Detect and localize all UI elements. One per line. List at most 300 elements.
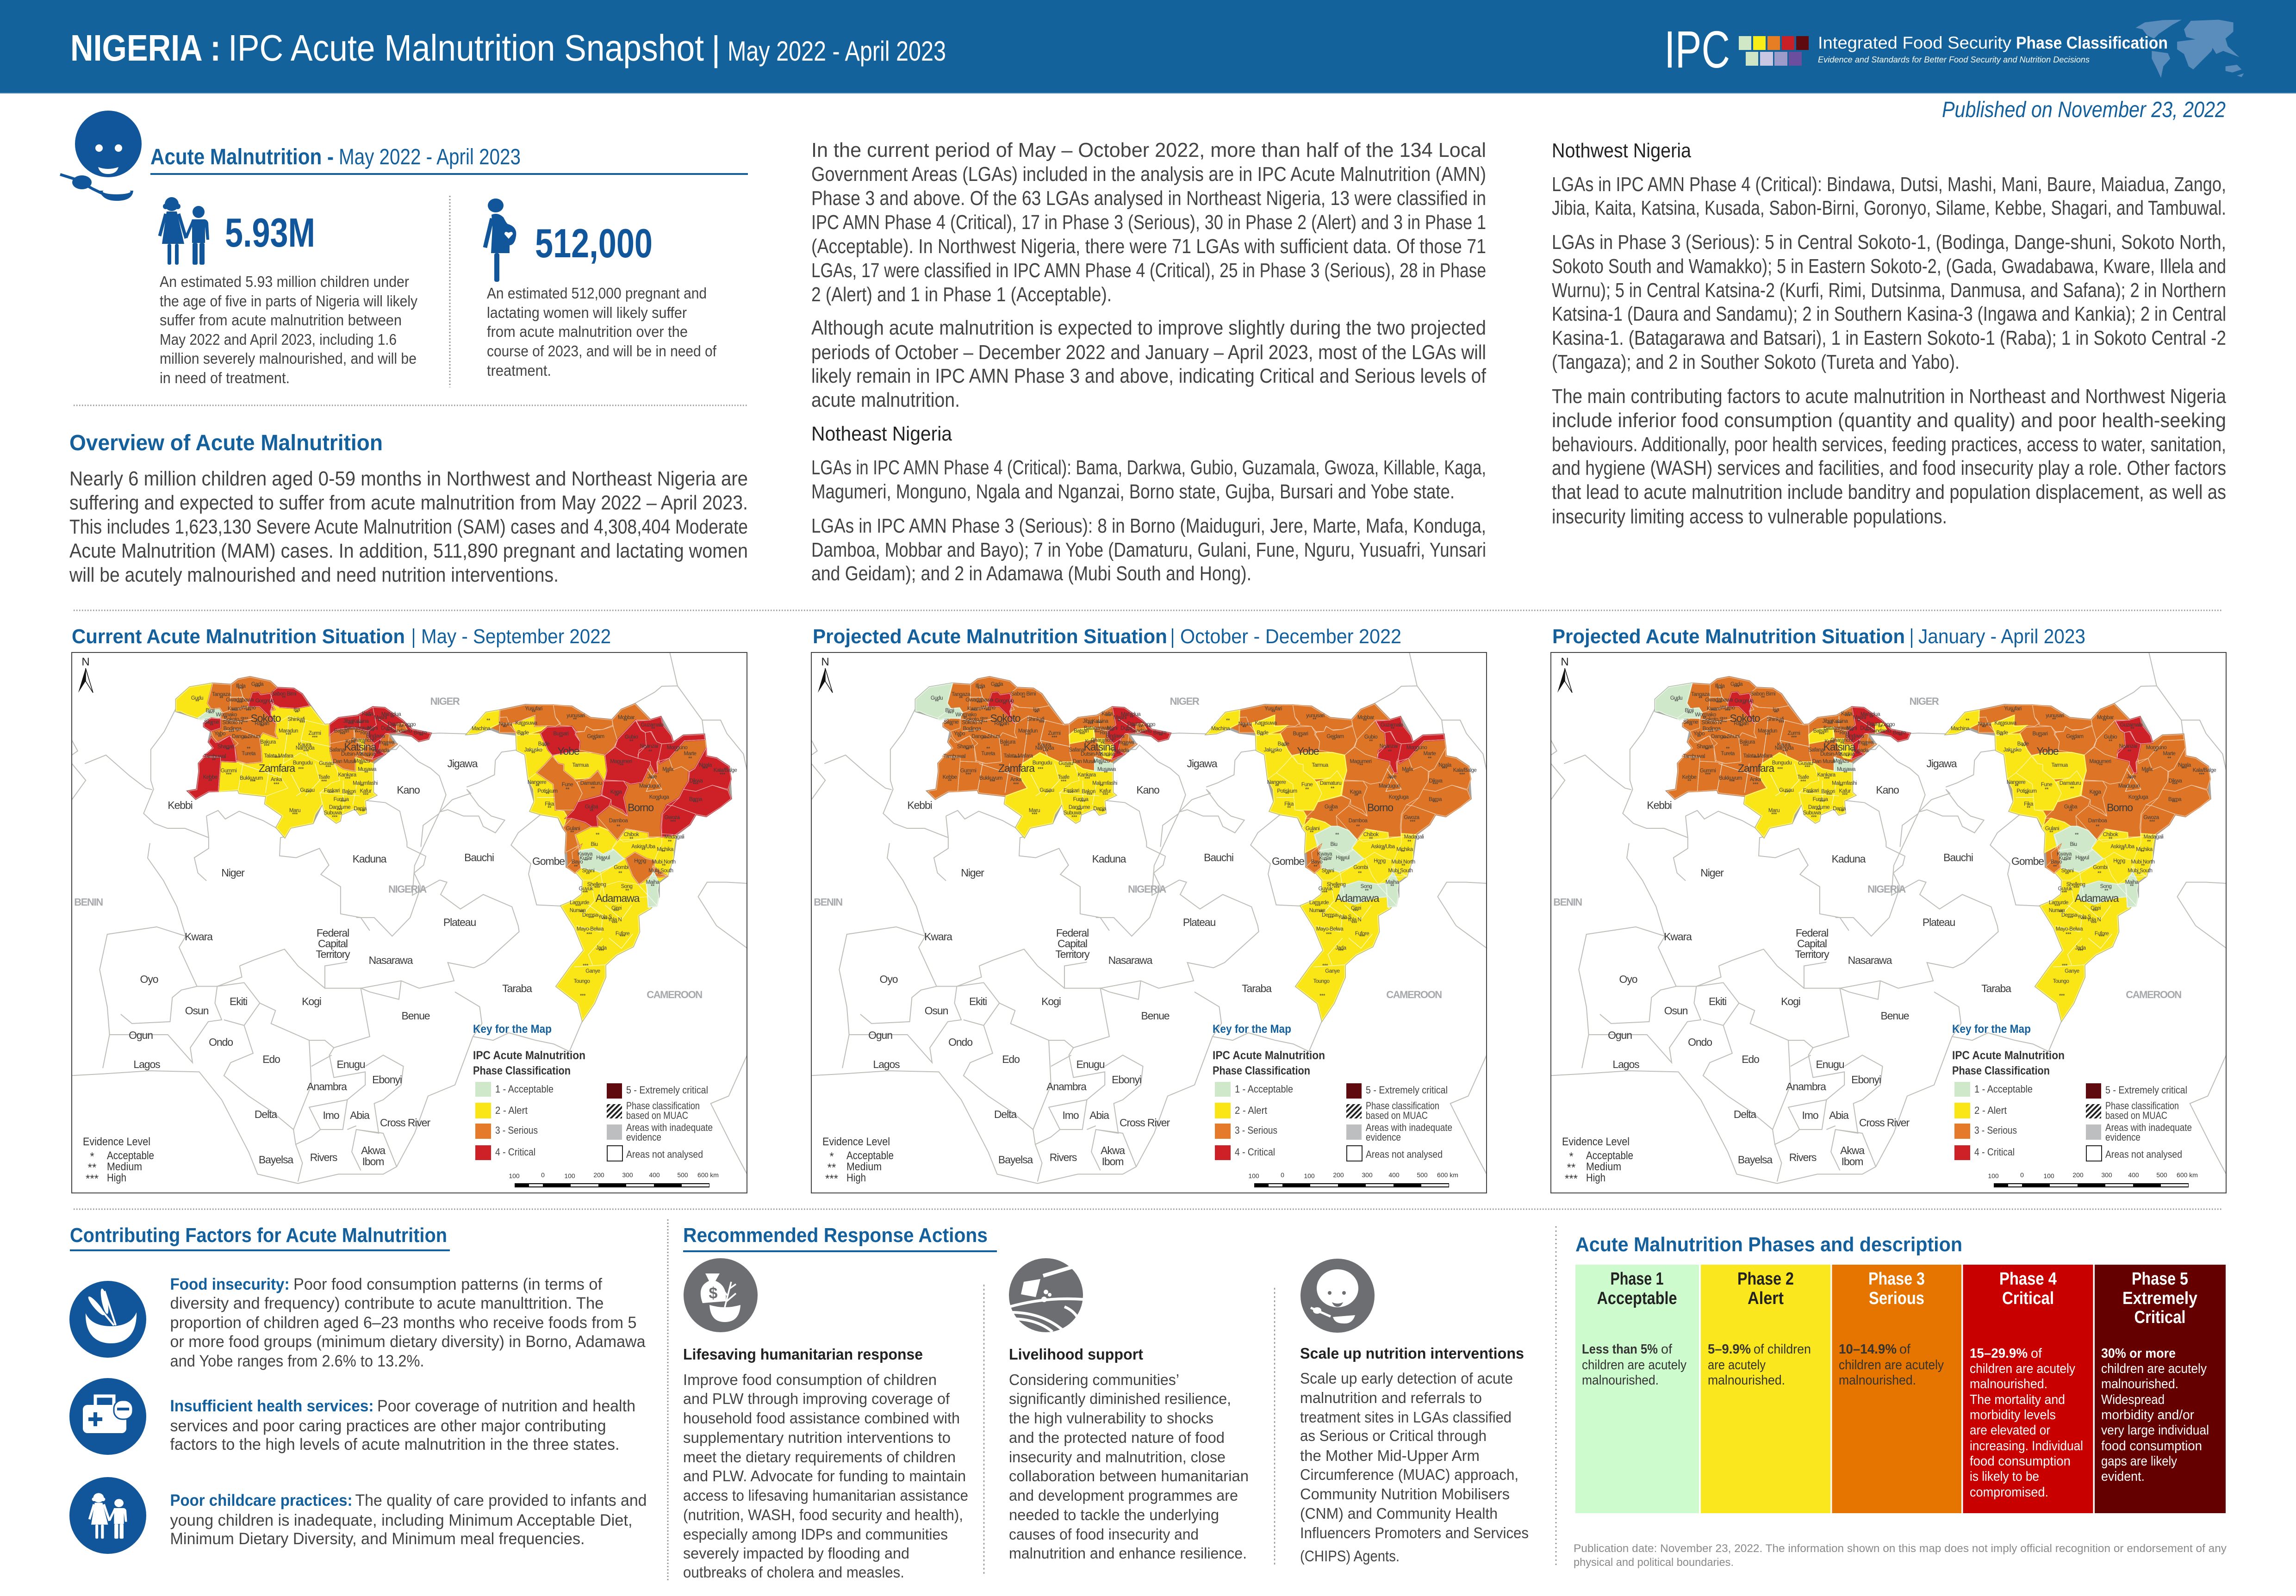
LGA labels: Biu (2070, 842, 2077, 847)
map key: 4 - Critical (1974, 1146, 2015, 1158)
icon: world map (2136, 20, 2244, 78)
LGA labels: *** (1459, 772, 1465, 778)
LGA labels: ** (1966, 718, 1970, 724)
LGA labels: ** (1761, 696, 1765, 701)
phase 4 column: 15–29.9% (1970, 1346, 2028, 1361)
panel: overview of acute malnutrition: Overview of Acute Malnutrition (69, 431, 383, 455)
state labels: Ogun (868, 1029, 892, 1041)
LGA labels: Shagari (218, 744, 234, 750)
LGA labels: Dikwa (1429, 778, 1443, 784)
LGA labels: ** (1130, 715, 1134, 721)
state labels: Borno (1367, 801, 1393, 814)
state labels: Edo (1002, 1053, 1020, 1065)
LGA labels: *** (1043, 749, 1049, 755)
LGA labels: *** (602, 917, 608, 923)
LGA labels: Sandamu (1870, 728, 1891, 734)
LGA labels: Bindawa (1106, 733, 1125, 739)
scale bar: 100 (564, 1172, 575, 1180)
LGA labels: ** (1849, 729, 1854, 734)
text block: current period and Northeast: Notheast Nigeria (811, 422, 952, 445)
LGA labels: Jakusko (524, 747, 542, 753)
panel: phases and description: Acute Malnutrition Phases and description (1575, 1233, 1962, 1256)
LGA labels: Kaga (1350, 789, 1362, 795)
LGA labels: ** (1341, 859, 1345, 864)
state labels: Nasarawa (369, 954, 413, 966)
phase 2 column: of children (1754, 1342, 1811, 1357)
LGA labels: ** (1100, 784, 1104, 789)
state labels: Nasarawa (1848, 954, 1892, 966)
LGA labels: Askira/Uba (631, 844, 656, 850)
LGA labels: Namoda (296, 745, 315, 751)
LGA labels: Kurfi (345, 739, 355, 745)
LGA labels: yunusari (2046, 713, 2064, 719)
LGA labels: Kwaya (578, 851, 593, 857)
LGA labels: Ganye (585, 969, 600, 974)
panel: overview of acute malnutrition (69, 431, 748, 586)
LGA labels: Dandume (1808, 805, 1829, 810)
LGA labels: ** (1697, 735, 1701, 740)
panel: acute malnutrition key figures (60, 111, 748, 387)
text block: Northwest Nigeria: (Tangaza); and 2 in Souther Sokoto (Tureta and Yabo). (1552, 351, 1960, 373)
LGA labels: ** (2109, 739, 2113, 745)
evidence level legend: Acceptable (107, 1149, 154, 1162)
stat: 5.93M children: suffer from acute malnutrition between (160, 311, 402, 329)
LGA labels: Batsari (1813, 728, 1828, 734)
LGA labels: Rabah (1734, 721, 1748, 727)
map key: based on MUAC (2105, 1110, 2167, 1121)
map key: evidence (2105, 1131, 2140, 1143)
LGA labels: ** (219, 696, 224, 702)
LGA labels: Nganzai (1380, 744, 1397, 749)
LGA labels: *** (720, 772, 726, 778)
state labels: Enugu (336, 1058, 365, 1070)
LGA labels: Kala/Balge (714, 768, 737, 773)
evidence level legend: Medium (107, 1161, 142, 1173)
LGA labels: Shinkafi (288, 717, 305, 722)
LGA labels: Jada (1336, 945, 1347, 951)
phase 5 column: food consumption (2101, 1439, 2202, 1453)
LGA labels: Kankia (361, 751, 376, 757)
LGA labels: Maiduguri (1379, 783, 1400, 789)
LGA labels: Safana (329, 747, 345, 753)
LGA labels: ** (959, 696, 963, 702)
LGA labels: ** (385, 744, 389, 749)
LGA labels: Zurmi (1788, 731, 1800, 736)
phase 5 column: malnourished. (2101, 1377, 2178, 1391)
phase 5 column: Phase 5 (2132, 1269, 2188, 1289)
LGA labels: Kankia (1840, 751, 1855, 757)
LGA labels: *** (1032, 812, 1038, 818)
LGA labels: *** (977, 687, 983, 692)
LGA labels: Funtua (334, 797, 349, 802)
LGA labels: Bade (538, 741, 550, 747)
LGA labels: ** (1104, 770, 1108, 776)
LGA labels: Rabah (255, 721, 269, 727)
LGA labels: ** (2167, 756, 2172, 762)
LGA labels: Malumfashi (1832, 781, 1857, 786)
LGA labels: Maiduguri (2118, 783, 2140, 789)
LGA labels: Jere (1387, 774, 1396, 780)
map key: based on MUAC (1366, 1110, 1428, 1121)
state labels: Rivers (1050, 1151, 1077, 1163)
LGA labels: Kware (1707, 706, 1721, 712)
LGA labels: Girei (611, 906, 622, 911)
LGA labels: *** (1052, 735, 1058, 741)
LGA labels: Wurno (981, 705, 996, 711)
text: livelihood support: and development programmes are (1009, 1487, 1238, 1504)
LGA labels: ** (1405, 770, 1409, 776)
state labels: Oyo (1619, 973, 1637, 985)
LGA labels: ** (360, 784, 364, 789)
LGA labels: ** (390, 715, 394, 721)
map key: Key for the Map (1952, 1023, 2031, 1036)
icon: north arrow (1557, 656, 1572, 693)
LGA labels: ** (2109, 837, 2113, 842)
LGA labels: Gada (1730, 682, 1743, 687)
LGA labels: Mani (1107, 726, 1117, 731)
LGA labels: Kebbe (943, 775, 957, 780)
LGA labels: Jada (596, 945, 607, 951)
evidence level legend: * (829, 1150, 834, 1163)
state labels: Rivers (310, 1151, 337, 1163)
LGA labels: *** (1729, 779, 1735, 785)
LGA labels: ** (661, 850, 666, 855)
state labels: Jigawa (1926, 758, 1957, 770)
LGA labels: Kankara (1817, 772, 1836, 778)
state labels: Edo (262, 1053, 280, 1065)
LGA labels: Gombi (2093, 865, 2108, 870)
LGA labels: ** (1687, 711, 1692, 717)
LGA labels: *** (1836, 721, 1842, 727)
LGA labels: Fika (545, 801, 554, 807)
text block: current period and Northeast: Phase 3 and above. Of the 63 LGAs analysed in Northeast Nigeria, 13 were classified in (811, 187, 1486, 210)
LGA labels: Shinkafi (1027, 717, 1044, 722)
LGA labels: Gubio (625, 734, 638, 740)
LGA labels: *** (366, 714, 372, 720)
LGA labels: ** (638, 862, 642, 868)
LGA labels: Gwadabawa (1705, 697, 1733, 703)
LGA labels: Monguno (2146, 745, 2166, 751)
LGA labels: Daura (1127, 721, 1141, 727)
LGA labels: *** (989, 779, 996, 785)
LGA labels: Subuwa (324, 810, 342, 816)
LGA labels: *** (985, 708, 991, 714)
LGA labels: *** (1819, 732, 1825, 738)
state labels: Kano (1136, 784, 1159, 796)
phase 5 column: gaps are likely (2101, 1454, 2177, 1469)
LGA labels: Numan (1309, 908, 1325, 913)
LGA labels: Chibok (624, 832, 639, 838)
stat: 5.93M children (160, 210, 417, 386)
text: insufficient health services: services and poor caring practices are other major contributing (170, 1417, 606, 1435)
LGA labels: ** (1739, 724, 1743, 730)
LGA labels: Goronyo (995, 698, 1014, 704)
LGA labels: Musawa (1837, 767, 1856, 772)
LGA labels: ** (650, 776, 654, 782)
state labels: Territory (1795, 948, 1829, 960)
LGA labels: *** (298, 767, 304, 772)
LGA labels: Tarmua (1312, 763, 1329, 768)
evidence level legend: Acceptable (1586, 1149, 1633, 1162)
LGA labels: Bungudu (1033, 760, 1052, 766)
text: lifesaving humanitarian response: Lifesaving humanitarian response (683, 1346, 923, 1363)
LGA labels: Shagari (957, 744, 974, 750)
state labels (814, 696, 1442, 1168)
LGA labels: Matazu (354, 758, 370, 764)
map key: Phase classification (2105, 1100, 2179, 1112)
LGA labels: Isa (1773, 707, 1780, 713)
LGA labels: *** (305, 790, 311, 796)
LGA labels: Lamurde (1309, 900, 1329, 906)
LGA labels: *** (1743, 744, 1749, 749)
LGA labels: Namoda (1775, 745, 1794, 751)
LGA labels: Ingawa (1858, 740, 1874, 745)
LGA labels: Shagari (1697, 744, 1713, 750)
LGA labels: Zango (1141, 722, 1155, 727)
state labels: BENIN (1553, 896, 1582, 908)
phase 1 column: children are acutely (1582, 1358, 1686, 1372)
LGA labels: Bakori (1082, 789, 1095, 795)
heading: acute malnutrition (150, 145, 748, 175)
LGA labels: ** (1689, 723, 1693, 729)
phase 1 column: Phase 1 (1611, 1269, 1663, 1289)
state labels: Taraba (502, 982, 532, 994)
LGA labels: Fufore (616, 931, 629, 937)
LGA labels: Nangere (2007, 780, 2025, 785)
LGA labels: Matazu (1833, 758, 1849, 764)
LGA labels: Dandume (329, 805, 350, 810)
LGA labels: ** (2000, 724, 2004, 730)
text block: Northwest Nigeria: insecurity limiting access to vulnerable populations. (1552, 505, 1947, 528)
state labels: Bauchi (1943, 851, 1973, 863)
LGA labels: *** (355, 730, 361, 736)
LGA labels: Yola N (2087, 917, 2101, 923)
LGA labels: Dan Musa (1812, 759, 1835, 764)
LGA labels (1670, 682, 2216, 999)
LGA labels: *** (1771, 812, 1777, 818)
LGA labels: *** (1025, 733, 1031, 738)
LGA labels: ** (532, 710, 536, 715)
LGA labels: *** (2062, 963, 2068, 969)
state labels: Gombe (2011, 855, 2044, 867)
state labels: Enugu (1816, 1058, 1844, 1070)
LGA labels: Baure (1893, 730, 1906, 736)
LGA labels: Hong (1374, 858, 1386, 864)
LGA labels: Biu (591, 842, 598, 847)
LGA labels: Mashi (1114, 715, 1126, 720)
state labels: Kaduna (1832, 853, 1866, 865)
LGA labels: Sokoto N (962, 720, 982, 726)
state labels: Adamawa (1335, 892, 1380, 904)
LGA labels: Bukkuyum (979, 776, 1002, 781)
LGA labels: Magumeri (2089, 759, 2111, 764)
state labels: Akwa (1840, 1144, 1865, 1156)
LGA labels: *** (2181, 766, 2187, 772)
LGA labels: ** (1139, 725, 1143, 731)
LGA labels: ** (1872, 724, 1876, 730)
title: May 2022 - April 2023 (728, 36, 946, 67)
LGA labels: ** (399, 725, 403, 731)
LGA labels: ** (1101, 741, 1105, 747)
stat: 512,000 women: treatment. (487, 362, 551, 379)
LGA labels: Gusau (1039, 788, 1054, 793)
panel: overview of acute malnutrition: will be acutely malnourished and need nutrition interventions. (69, 564, 559, 586)
LGA labels: *** (238, 687, 244, 692)
LGA labels: ** (359, 762, 363, 768)
LGA labels: Illela (976, 683, 985, 689)
LGA labels: Geidam (587, 734, 604, 739)
LGA labels: Sabon Birni (1011, 691, 1036, 697)
state labels: CAMEROON (1386, 989, 1442, 1000)
LGA labels: Ngala (2178, 763, 2191, 768)
LGA labels: Mani (367, 726, 378, 731)
icon: livelihood farm and seeds (1009, 1258, 1083, 1332)
map key: IPC Acute Malnutrition (1213, 1049, 1325, 1062)
LGA labels: *** (243, 736, 249, 742)
state labels: Ebonyi (1851, 1074, 1881, 1086)
state labels: Akwa (1101, 1144, 1125, 1156)
LGA labels: Dutsi (381, 726, 392, 731)
scale bar: 0 (2020, 1171, 2024, 1179)
phase 4 column: are elevated or (1970, 1423, 2050, 1438)
LGA labels: Silame (944, 720, 958, 725)
LGA labels: ** (1898, 733, 1903, 739)
LGA labels: Fufore (1355, 931, 1369, 937)
LGA labels: Zurmi (1048, 731, 1060, 736)
LGA labels: Tambuwal (1683, 754, 1705, 759)
LGA labels: *** (965, 772, 971, 778)
LGA labels: Sandamu (391, 728, 412, 734)
LGA labels: *** (1328, 916, 1334, 921)
LGA labels: Gubio (1364, 734, 1377, 740)
LGA labels: *** (1319, 994, 1325, 999)
phase 3 column: Phase 3 (1868, 1269, 1925, 1289)
state labels: NIGER (1910, 696, 1939, 707)
IPC logo: IPC (1664, 20, 1730, 79)
LGA labels: *** (1353, 909, 1359, 914)
LGA labels: ** (1397, 872, 1401, 877)
LGA labels: Magumeri (1350, 759, 1372, 764)
state labels: NIGER (1170, 696, 1200, 707)
LGA labels: ** (1703, 715, 1707, 721)
LGA labels: Katsina (1832, 719, 1848, 724)
LGA labels: Toungo (1313, 979, 1329, 984)
stat: 5.93M children: in need of treatment. (160, 369, 290, 386)
LGA labels: Faskari (1803, 788, 1819, 794)
LGA labels: Demsa (1322, 913, 1338, 918)
LGA labels: Lamurde (2049, 900, 2068, 906)
LGA labels: Yola N (608, 917, 622, 923)
LGA labels: Jibia (343, 719, 354, 724)
title: | (711, 29, 721, 68)
LGA labels: Katsina (353, 719, 369, 724)
LGA labels: Bodinga (1703, 726, 1721, 732)
text: lifesaving humanitarian response: meet the dietary requirements of children (683, 1448, 956, 1466)
LGA labels: Guzamala (641, 722, 664, 728)
state labels: NIGERIA (1867, 883, 1906, 895)
LGA labels: ** (407, 725, 411, 731)
LGA labels: Mobbar (1357, 715, 1375, 720)
LGA labels: Musawa (1097, 767, 1116, 772)
state labels: Lagos (1612, 1058, 1639, 1070)
LGA labels: Shelleng (2066, 882, 2085, 888)
LGA labels: ** (601, 859, 605, 864)
LGA labels: Gulani (2045, 826, 2059, 832)
LGA labels: *** (340, 732, 346, 738)
LGA labels: Rimi (360, 730, 370, 736)
Northwest phase regions (1655, 677, 1910, 837)
Northeast phase regions (1947, 704, 2210, 1020)
state labels: Ondo (209, 1036, 233, 1048)
LGA labels: ** (1869, 715, 1873, 721)
LGA labels: ** (1110, 729, 1114, 734)
LGA labels: ** (1305, 787, 1309, 793)
LGA labels: Karasuwa (515, 720, 538, 726)
phase 1 column (1575, 1265, 1699, 1513)
phase 4 column: The mortality and (1970, 1392, 2065, 1407)
LGA labels: Fika (1284, 801, 1294, 807)
phase 3 column: children are acutely (1839, 1358, 1944, 1372)
LGA labels: *** (1102, 793, 1108, 798)
LGA labels: Kaga (2090, 789, 2102, 795)
LGA labels: Namoda (1035, 745, 1054, 751)
state labels: Ogun (1608, 1029, 1632, 1041)
Northeast phase regions (467, 704, 731, 1020)
panel: overview of acute malnutrition: This includes 1,623,130 Severe Acute Malnutrition (SAM) cases and 4,308,404 Moderate (69, 515, 748, 538)
LGA labels: Bursari (2033, 731, 2047, 737)
LGA labels: Jakusko (2004, 747, 2021, 753)
LGA labels: ** (2103, 719, 2107, 724)
LGA labels: *** (345, 776, 351, 782)
map key: 2 - Alert (1974, 1105, 2007, 1116)
state labels: Lagos (133, 1058, 160, 1070)
LGA labels: *** (1094, 730, 1100, 736)
LGA labels: Ingawa (379, 740, 395, 745)
state labels: Bayelsa (1738, 1154, 1773, 1166)
scale bar: 100 (1304, 1172, 1315, 1180)
LGA labels: Danja (354, 806, 367, 812)
scale bar: 0 (1281, 1171, 1284, 1179)
LGA labels: Song (2100, 884, 2112, 889)
LGA labels: ** (2015, 784, 2019, 789)
icon: mother and child (69, 1477, 146, 1554)
text: lifesaving humanitarian response: and PLW. Advocate for funding to maintain (683, 1467, 966, 1484)
LGA labels: ** (1838, 762, 1842, 768)
state labels: Kano (1876, 784, 1899, 796)
LGA labels: *** (575, 904, 581, 909)
LGA labels: ** (1147, 725, 1151, 731)
stat: 5.93M children: May 2022 and April 2023, including 1.6 (160, 331, 397, 348)
LGA labels: ** (2025, 792, 2029, 797)
LGA labels: Nguru (1978, 721, 1991, 727)
LGA labels: Karasuwa (1255, 720, 1277, 726)
LGA labels: *** (968, 730, 974, 735)
LGA labels: *** (1338, 949, 1344, 954)
LGA labels: Jibia (1083, 719, 1093, 724)
LGA labels: Baure (1153, 730, 1166, 736)
LGA labels: Mai'adua (1860, 712, 1880, 717)
LGA labels: *** (702, 766, 708, 772)
state labels: Territory (316, 948, 350, 960)
LGA labels: *** (1039, 720, 1045, 726)
LGA labels: Dange-Shuni (232, 734, 261, 739)
LGA labels: *** (1765, 733, 1771, 738)
phase 3 column: of (1899, 1342, 1911, 1357)
state labels: NIGERIA (1128, 883, 1166, 895)
LGA labels: ** (573, 717, 577, 723)
state labels: Anambra (1786, 1081, 1826, 1093)
LGA labels: *** (299, 720, 305, 726)
